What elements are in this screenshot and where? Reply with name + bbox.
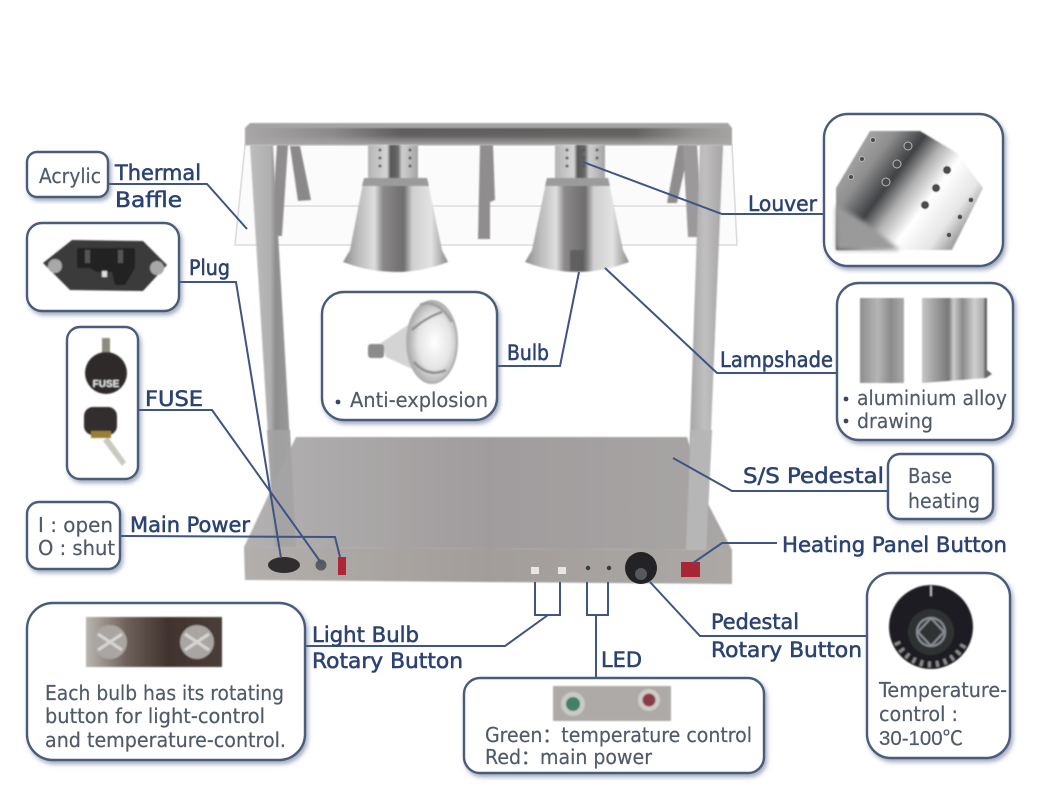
panel: temperature control xyxy=(867,573,1010,758)
product: heat lamp stand xyxy=(235,123,737,584)
panel: plug xyxy=(27,223,179,311)
text: rotary button description xyxy=(45,681,286,752)
label: Thermal Baffle: Baffle xyxy=(115,188,182,212)
panel: bulb xyxy=(322,292,497,420)
label: Louver: Louver xyxy=(748,192,817,216)
icon: fuse holder with pin xyxy=(84,407,126,466)
text: open and shut xyxy=(38,513,115,560)
label: Plug: Plug xyxy=(189,256,230,280)
icon: temperature dial xyxy=(889,585,973,669)
pedestal base xyxy=(244,430,732,584)
text: base heating: heating xyxy=(908,489,980,513)
panel: fuse xyxy=(67,327,138,479)
label: Thermal Baffle: Thermal xyxy=(114,161,201,185)
label: Light Bulb Rotary Button: Rotary Button xyxy=(312,649,463,673)
text: anti-explosion: Anti-explosion xyxy=(350,388,488,412)
label: Pedestal Rotary Button: Pedestal xyxy=(711,610,799,634)
panel: acrylic xyxy=(27,152,108,197)
text: LED meaning xyxy=(485,723,752,769)
right lamp xyxy=(525,145,629,272)
image: LED indicators xyxy=(553,686,671,721)
text: temperature range: 30-100℃ xyxy=(879,728,963,750)
text: material notes: aluminium alloy xyxy=(857,386,1007,410)
label: Lampshade: Lampshade xyxy=(720,348,833,372)
label: FUSE: FUSE xyxy=(145,387,203,411)
panel: lampshade xyxy=(837,283,1013,440)
text: temperature range: control : xyxy=(879,702,958,726)
base controls: socket, fuse, switches, LEDs, dial xyxy=(268,552,700,584)
label: Pedestal Rotary Button xyxy=(711,610,862,662)
image: perforated louver close-up xyxy=(836,131,983,250)
text: open and shut: I : open xyxy=(38,513,113,537)
label: Thermal Baffle xyxy=(114,161,201,212)
label: Light Bulb Rotary Button: Light Bulb xyxy=(312,623,419,647)
top bar xyxy=(245,123,732,145)
label: LED: LED xyxy=(601,648,642,672)
panel: louver xyxy=(824,114,1003,266)
label: Main Power: Main Power xyxy=(130,513,250,537)
text: LED meaning: Green：temperature control xyxy=(485,723,752,747)
label: Heating Panel Button: Heating Panel Button xyxy=(782,533,1007,557)
panel: LED xyxy=(464,678,764,773)
icon: infrared bulb xyxy=(368,301,457,383)
text: temperature range: Temperature- xyxy=(878,678,1007,702)
text: LED meaning: Red：main power xyxy=(485,745,653,769)
text: Acrylic: Acrylic xyxy=(39,164,101,188)
panel: light bulb rotary button xyxy=(27,603,305,760)
acrylic thermal baffle xyxy=(235,145,737,245)
icon: power inlet xyxy=(43,240,167,291)
text: base heating xyxy=(908,464,980,513)
icon: fuse holder cap xyxy=(85,338,127,394)
label: Bulb: Bulb xyxy=(507,341,549,365)
panel: switch states xyxy=(27,502,120,569)
image: rotary buttons xyxy=(86,617,222,667)
text: rotary button description: and temperature-control. xyxy=(45,728,286,752)
icon: fuse holder cap: FUSE xyxy=(93,379,120,390)
image: brushed aluminium samples xyxy=(860,298,992,383)
text: temperature range xyxy=(878,678,1007,750)
label: Light Bulb Rotary Button xyxy=(312,623,463,673)
text: open and shut: O : shut xyxy=(38,536,115,560)
text: rotary button description: button for light-control xyxy=(45,704,265,728)
leader lines xyxy=(108,162,888,678)
text: rotary button description: Each bulb has its rotating xyxy=(45,681,284,705)
text: base heating: Base xyxy=(908,464,952,488)
label: Pedestal Rotary Button: Rotary Button xyxy=(711,638,862,662)
panel: base heating xyxy=(888,454,993,519)
text: material notes: drawing xyxy=(857,409,933,433)
left lamp xyxy=(343,145,448,272)
text: material notes xyxy=(844,386,1007,433)
lamp support brackets xyxy=(271,145,703,239)
label: S/S Pedestal: S/S Pedestal xyxy=(743,464,884,488)
left and right legs xyxy=(250,145,723,550)
